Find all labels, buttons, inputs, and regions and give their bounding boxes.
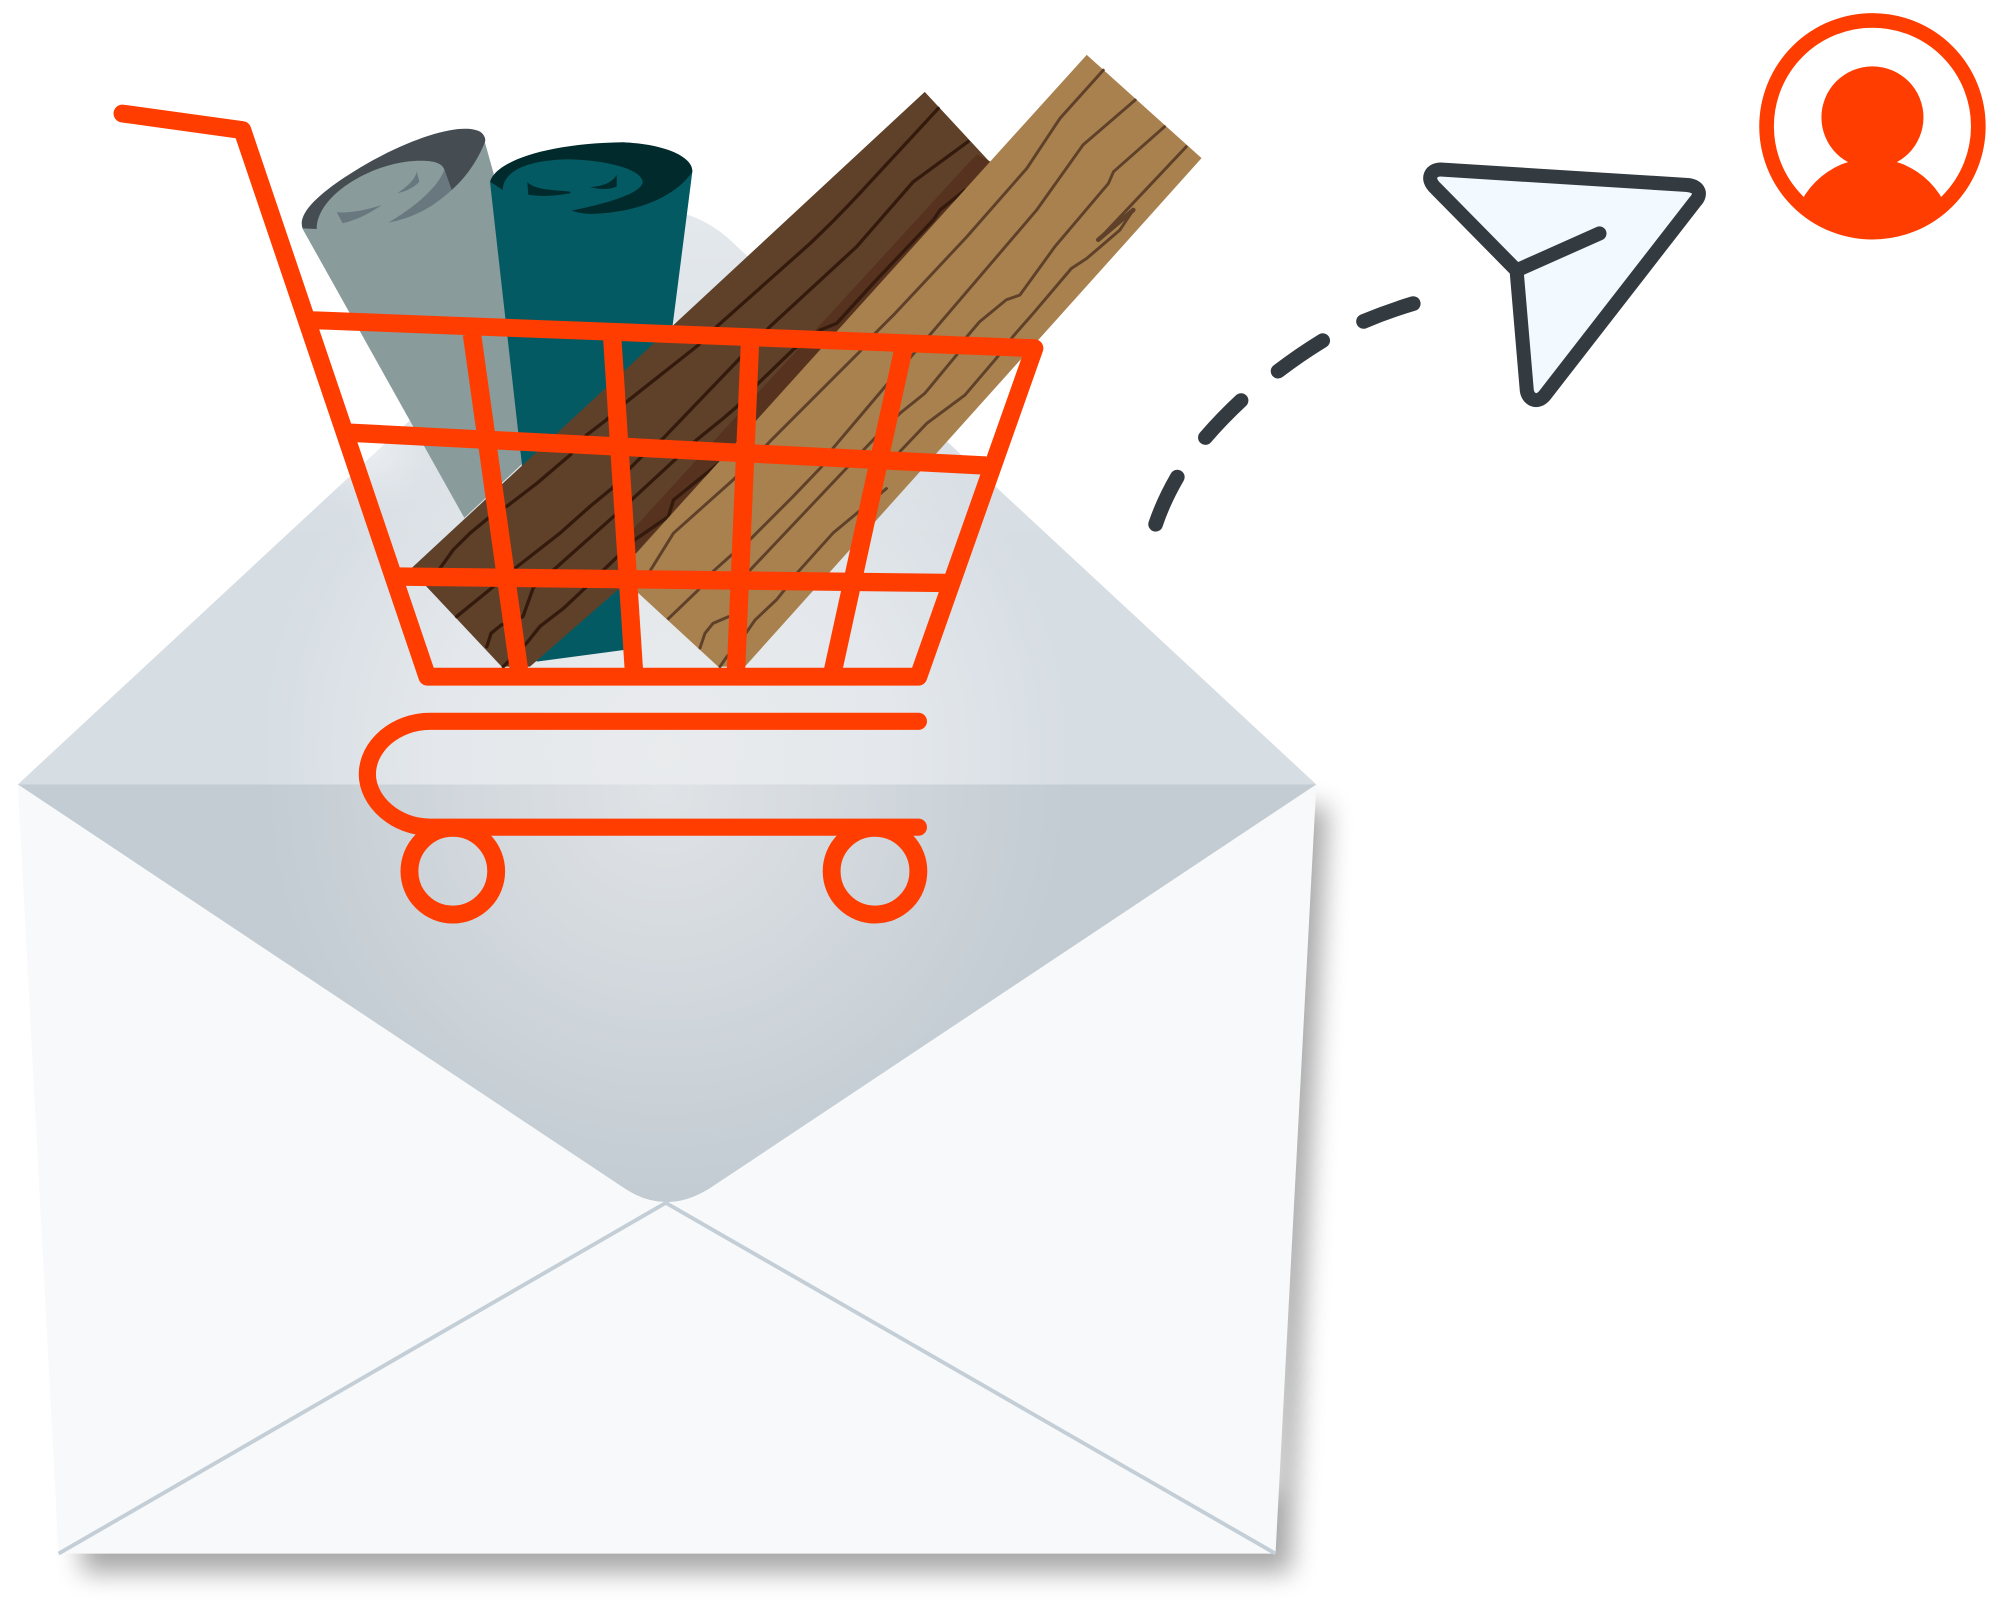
grey paper roll — [302, 129, 522, 518]
dashed flight path — [1156, 304, 1413, 524]
dark plank grain — [440, 108, 968, 667]
avatar head — [1821, 66, 1923, 168]
cart base bar — [367, 721, 918, 827]
light plank grain — [651, 70, 1186, 667]
teal paper roll — [490, 142, 692, 662]
grey roll top — [302, 129, 485, 229]
envelope back flap — [18, 212, 1316, 784]
basket wires — [344, 334, 986, 671]
shopping cart — [122, 114, 1034, 915]
dark wood plank — [411, 92, 991, 667]
soft highlight behind the cart — [332, 417, 408, 481]
envelope shadow — [82, 806, 1328, 1573]
paper plane icon — [1430, 170, 1699, 400]
envelope — [18, 212, 1328, 1573]
envelope front — [18, 784, 1316, 1554]
plank shadow strip — [621, 154, 991, 559]
plank knot — [1098, 210, 1133, 240]
envelope interior — [18, 784, 1316, 1202]
right wheel — [832, 828, 918, 915]
cart handle and basket frame — [122, 114, 1034, 677]
light wood plank — [619, 55, 1202, 667]
teal roll top — [490, 142, 692, 214]
left wheel — [409, 828, 496, 915]
user avatar icon — [1759, 13, 1986, 240]
envelope fold lines — [59, 1203, 1276, 1554]
avatar body — [1804, 162, 1942, 225]
